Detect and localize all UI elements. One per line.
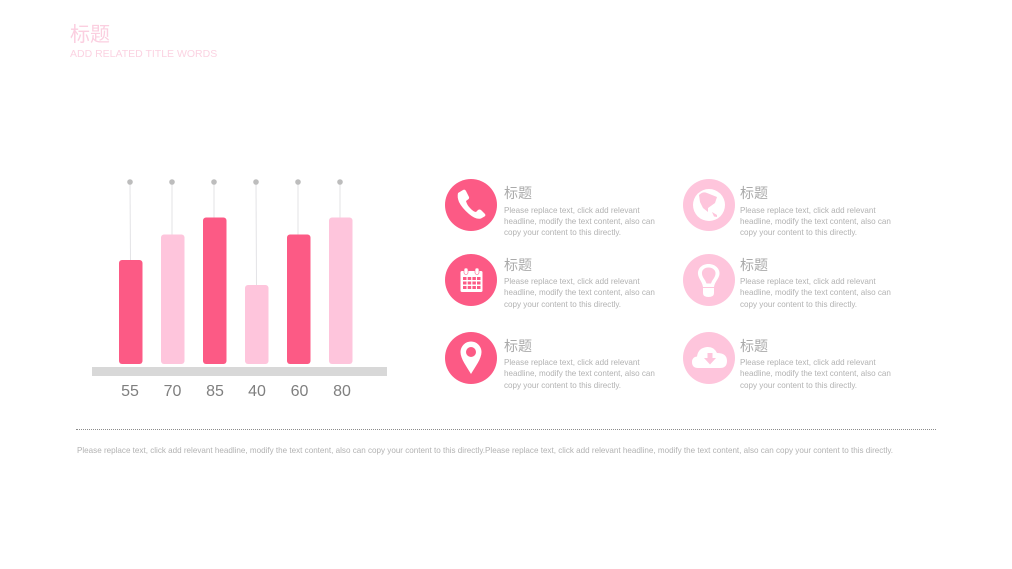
text 3: headline, modify the text content, also can (504, 369, 655, 378)
text 6 (740, 358, 891, 390)
text 6: headline, modify the text content, also can (740, 369, 891, 378)
text 5 (740, 277, 891, 309)
icon: globe (683, 179, 735, 231)
value label 85: 85 (206, 383, 224, 400)
subtitle: ADD RELATED TITLE WORDS (70, 48, 217, 60)
icon: phone (445, 179, 497, 231)
text 1: copy your content to this directly. (504, 228, 621, 237)
heading 1: 标题 (504, 185, 532, 201)
text 5: Please replace text, click add relevant (740, 277, 876, 286)
heading 3: 标题 (504, 338, 532, 354)
heading 5: 标题 (740, 257, 768, 273)
footer text: Please replace text, click add relevant headline, modify the text content, also can copy your content to this directly.Please replace text, click add relevant headline, modify the text content, also can copy your content to this directly. (77, 446, 893, 455)
text 1 (504, 206, 655, 237)
text 1: Please replace text, click add relevant (504, 206, 640, 214)
icon: map pin (445, 332, 497, 384)
heading 2: 标题 (504, 257, 532, 273)
icon: light bulb (683, 254, 735, 306)
value label 40: 40 (248, 383, 266, 400)
text 2: headline, modify the text content, also can (504, 288, 655, 297)
value label 70: 70 (164, 383, 181, 400)
text 6: Please replace text, click add relevant (740, 358, 876, 367)
text 1: headline, modify the text content, also can (504, 217, 655, 226)
text 2 (504, 277, 655, 309)
text 5: copy your content to this directly. (740, 300, 857, 309)
text 6: copy your content to this directly. (740, 381, 857, 390)
value label 60: 60 (291, 383, 308, 400)
text 3: Please replace text, click add relevant (504, 358, 640, 367)
text 5: headline, modify the text content, also can (740, 288, 891, 297)
text 4: headline, modify the text content, also can (740, 217, 891, 226)
value label 80: 80 (333, 383, 351, 400)
text 3: copy your content to this directly. (504, 381, 621, 390)
bar chart (92, 179, 387, 376)
text 2: copy your content to this directly. (504, 300, 621, 309)
text 4: copy your content to this directly. (740, 228, 857, 237)
text 3 (504, 358, 655, 390)
dotted divider (76, 429, 936, 430)
text 4: Please replace text, click add relevant (740, 206, 876, 214)
text 4 (740, 206, 891, 237)
heading 6: 标题 (740, 338, 768, 354)
text 2: Please replace text, click add relevant (504, 277, 640, 286)
icon: calendar (445, 254, 497, 306)
heading 4: 标题 (740, 185, 768, 201)
icon: cloud download (683, 332, 735, 384)
value label 55: 55 (121, 383, 139, 400)
title: 标题 (70, 24, 110, 46)
